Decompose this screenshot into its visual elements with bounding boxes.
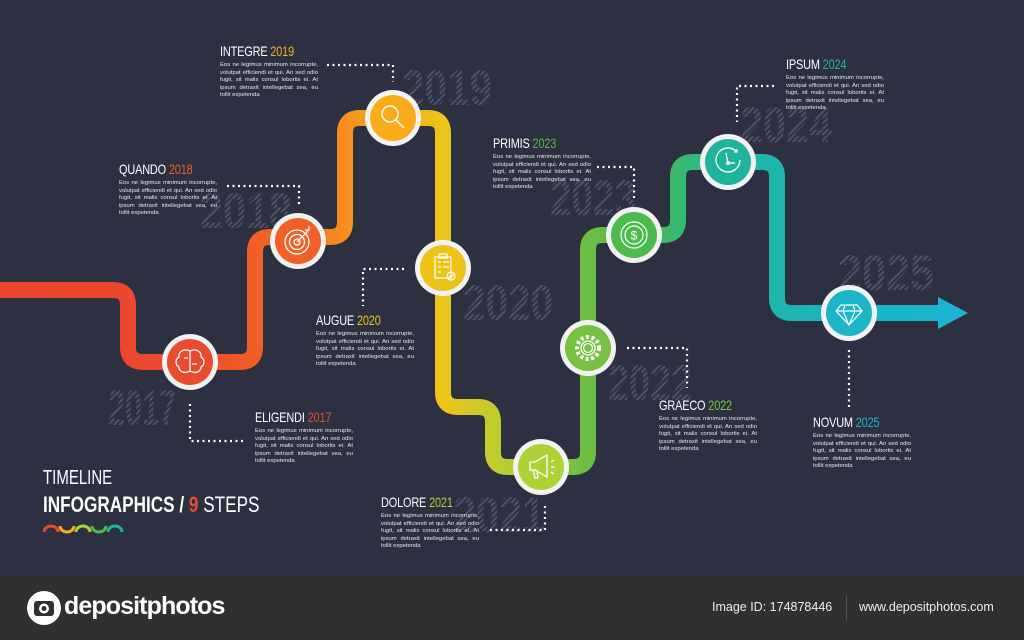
text: NOVUM 2025 — [813, 414, 911, 469]
text: AUGUE 2020: AUGUE 2020 — [316, 312, 381, 328]
text: QUANDO 2018: Eos ne legimus minimum incorrupte, volutpat efficiendi et qui. An sed odio fugit, sit malis consul lobortis ei. At ipsum detraxit intellegebat sea, eu tollit expetenda — [119, 180, 217, 216]
text: QUANDO 2018 — [119, 161, 217, 216]
title: TIMELINE — [43, 467, 112, 489]
node 2023 dollar: $ — [631, 228, 638, 242]
node 2021 megaphone — [513, 439, 569, 495]
dotted connectors — [190, 65, 849, 530]
text: ELIGENDI 2017: Eos ne legimus minimum incorrupte, volutpat efficiendi et qui. An sed odio fugit, sit malis consul lobortis ei. At ipsum detraxit intellegebat sea, eu tollit expetenda — [255, 428, 353, 464]
big hatched years: 2024 — [740, 97, 832, 153]
big hatched years: 2025 — [838, 245, 934, 301]
text: GRAECO 2022 — [659, 397, 757, 452]
big hatched years: 2020 — [463, 275, 553, 331]
text: INTEGRE 2019: INTEGRE 2019 — [220, 43, 294, 59]
text: PRIMIS 2023: PRIMIS 2023 — [493, 135, 556, 151]
big hatched years — [108, 60, 934, 543]
text: ELIGENDI 2017 — [255, 409, 353, 464]
big hatched years: 2022 — [608, 355, 692, 411]
node 2018 target — [270, 213, 326, 269]
text: INTEGRE 2019: Eos ne legimus minimum incorrupte, volutpat efficiendi et qui. An sed odio fugit, sit malis consul lobortis ei. At ipsum detraxit intellegebat sea, eu tollit expetenda — [220, 62, 318, 98]
text: IPSUM 2024 — [786, 56, 884, 111]
footer — [0, 576, 1024, 640]
text: DOLORE 2021: DOLORE 2021 — [381, 494, 453, 510]
text: PRIMIS 2023: Eos ne legimus minimum incorrupte, volutpat efficiendi et qui. An sed odio fugit, sit malis consul lobortis ei. At ipsum detraxit intellegebat sea, eu tollit expetenda — [493, 154, 591, 190]
text: IPSUM 2024: Eos ne legimus minimum incorrupte, volutpat efficiendi et qui. An sed odio fugit, sit malis consul lobortis ei. At ipsum detraxit intellegebat sea, eu tollit expetenda — [786, 75, 884, 111]
footer logo: depositphotos — [64, 592, 225, 620]
node 2024 clock — [700, 134, 756, 190]
node 2017 brain — [162, 334, 218, 390]
big hatched years: 2019 — [402, 60, 492, 116]
title: INFOGRAPHICS / 9 STEPS — [43, 492, 259, 517]
text: PRIMIS 2023 — [493, 135, 591, 190]
node 2019 magnifier — [365, 90, 421, 146]
text: INTEGRE 2019 — [220, 43, 318, 98]
title — [43, 467, 259, 534]
text: NOVUM 2025: Eos ne legimus minimum incorrupte, volutpat efficiendi et qui. An sed odio fugit, sit malis consul lobortis ei. At ipsum detraxit intellegebat sea, eu tollit expetenda — [813, 433, 911, 469]
big hatched years: 2017 — [108, 380, 176, 436]
footer: www.depositphotos.com — [859, 600, 994, 614]
node 2020 clipboard — [415, 240, 471, 296]
footer logo — [27, 591, 225, 625]
node 2023 dollar — [606, 207, 662, 263]
text: NOVUM 2025: NOVUM 2025 — [813, 414, 879, 430]
text: DOLORE 2021: Eos ne legimus minimum incorrupte, volutpat efficiendi et qui. An sed odio fugit, sit malis consul lobortis ei. At ipsum detraxit intellegebat sea, eu tollit expetenda — [381, 513, 479, 549]
squiggle decoration — [43, 524, 124, 534]
text: ELIGENDI 2017: ELIGENDI 2017 — [255, 409, 331, 425]
text: GRAECO 2022: Eos ne legimus minimum incorrupte, volutpat efficiendi et qui. An sed odio fugit, sit malis consul lobortis ei. At ipsum detraxit intellegebat sea, eu tollit expetenda — [659, 416, 757, 452]
text: AUGUE 2020: Eos ne legimus minimum incorrupte, volutpat efficiendi et qui. An sed odio fugit, sit malis consul lobortis ei. At ipsum detraxit intellegebat sea, eu tollit expetenda — [316, 331, 414, 367]
big hatched years: 2018 — [200, 183, 292, 239]
big hatched years: 2023 — [550, 170, 636, 226]
text: IPSUM 2024: IPSUM 2024 — [786, 56, 846, 72]
node 2022 gear — [560, 320, 616, 376]
text: GRAECO 2022: GRAECO 2022 — [659, 397, 732, 413]
text: QUANDO 2018: QUANDO 2018 — [119, 161, 193, 177]
big hatched years: 2021 — [453, 487, 545, 543]
text: AUGUE 2020 — [316, 312, 414, 367]
text: DOLORE 2021 — [381, 494, 479, 549]
footer info: Image ID: 174878446 — [712, 600, 832, 614]
timeline road — [0, 118, 968, 467]
node 2025 diamond — [821, 285, 877, 341]
